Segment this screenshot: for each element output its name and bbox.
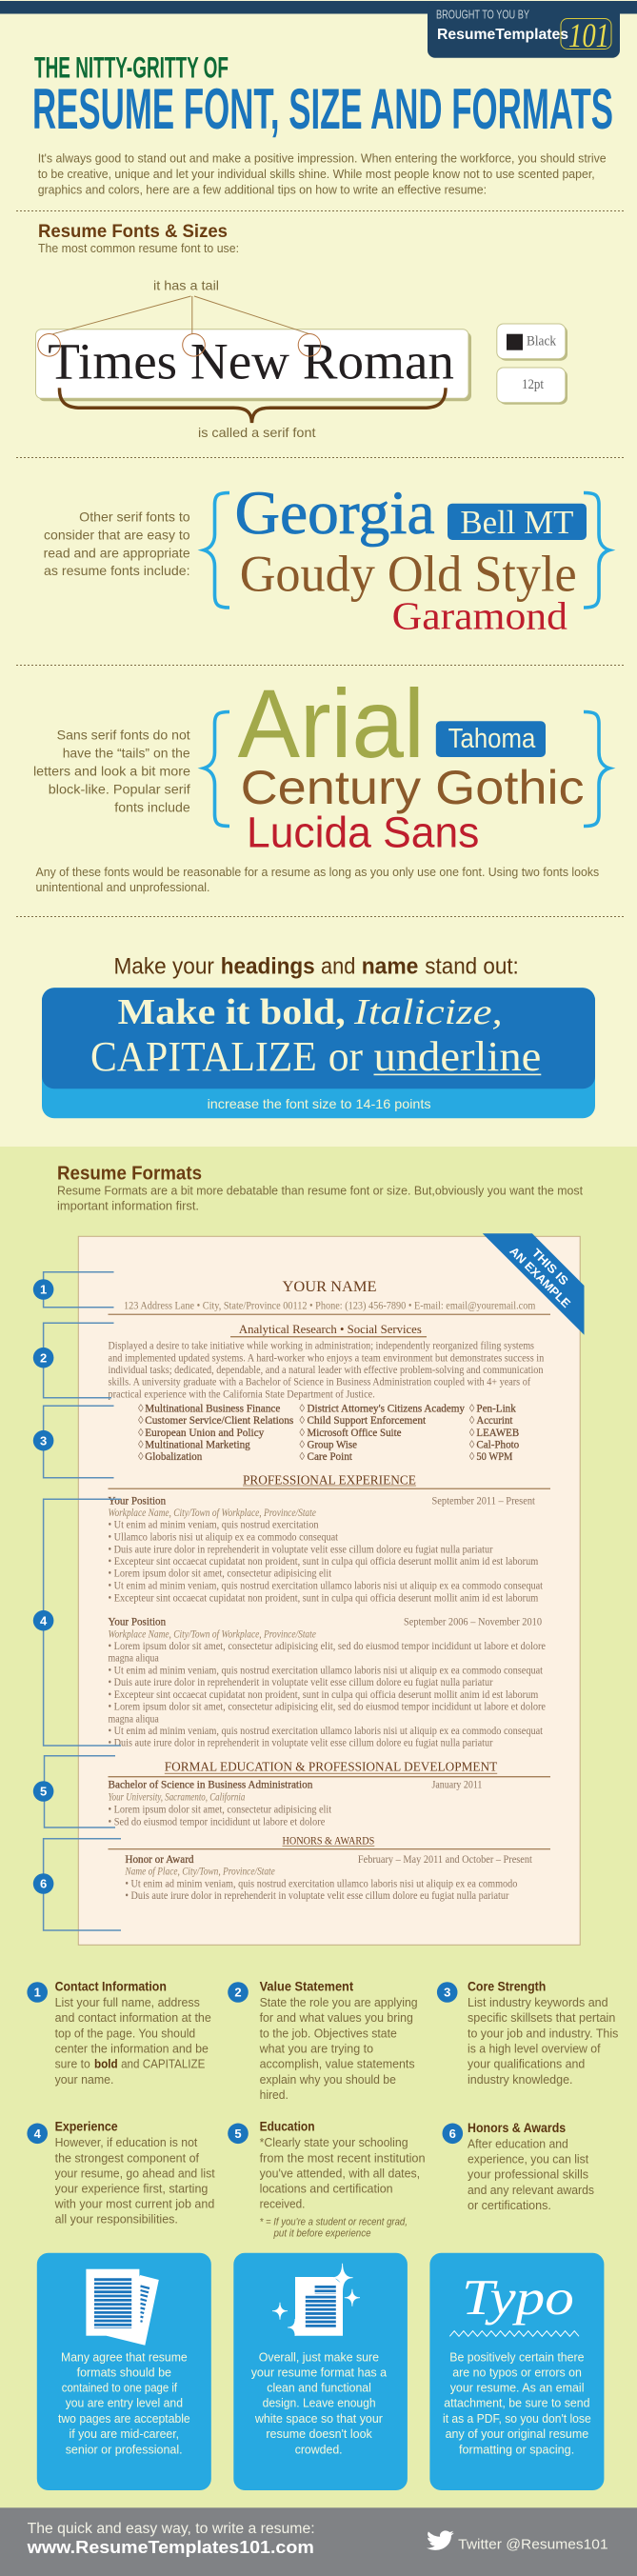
brand tab <box>428 1 620 58</box>
card: page length <box>37 2253 211 2490</box>
card text: Be positively certain there <box>449 2349 585 2364</box>
resume: core strengths list: ◊ <box>299 1403 305 1414</box>
tip 4: experience: 4 <box>34 2127 42 2141</box>
callout 1: contact bracket <box>33 1272 113 1308</box>
resume: honors and awards <box>109 1834 550 1902</box>
tip 5: education: locations and certification <box>260 2181 393 2195</box>
font sample: tahoma: Tahoma <box>448 724 536 754</box>
intro paragraph: It's always good to stand out and make a positive impression. When entering the workforce, you should strive <box>38 151 607 166</box>
callout 5: education bracket: 5 <box>40 1785 47 1799</box>
resume: core strengths list: ◊ <box>299 1428 305 1439</box>
footer band <box>0 2507 637 2576</box>
font sample: georgia: Georgia <box>235 478 435 547</box>
tip 2: value statement: for and what values you bring <box>260 2010 413 2025</box>
emphasis banner: increase the font size to 14-16 points <box>208 1096 431 1111</box>
resume: professional experience: • Duis aute irure dolor in reprehenderit in voluptate velit esse cillum dolore eu fugiat nulla pariatur <box>109 1738 493 1749</box>
footer call to action <box>27 2521 315 2557</box>
resume: core strengths list: Care Point <box>307 1451 353 1463</box>
tip 5: education <box>228 2120 426 2240</box>
callout 3: core strengths bracket: 3 <box>40 1433 47 1448</box>
tip 3: core strength: specific skillsets that pertain <box>468 2010 615 2025</box>
tip 6: honors and awards: Honors & Awards <box>468 2121 566 2135</box>
resume: core strengths list: Customer Service/Client Relations <box>145 1415 294 1427</box>
font sample: goudy old style: Goudy Old Style <box>240 546 577 603</box>
card text: Many agree that resume <box>61 2349 188 2364</box>
tip 1: contact information: center the information and be <box>55 2041 209 2055</box>
resume: core strengths list: Child Support Enforcement <box>307 1415 427 1427</box>
resume: core strengths list: ◊ <box>469 1440 475 1451</box>
brand tab: ResumeTemplates <box>437 27 568 43</box>
size chip: 12pt: 12pt <box>522 377 544 392</box>
resume: core strengths list: Pen-Link <box>476 1403 516 1414</box>
tip 2: value statement: to the job. Objectives state <box>260 2026 397 2040</box>
resume: core strengths list: Group Wise <box>307 1440 357 1451</box>
resume: core strengths list: ◊ <box>469 1415 475 1427</box>
tip 2: value statement: Value Statement <box>260 1980 354 1994</box>
card text: senior or professional. <box>66 2442 183 2456</box>
resume: professional experience: Workplace Name, City/Town of Workplace, Province/State <box>109 1508 316 1519</box>
tip 2: value statement: 2 <box>234 1986 242 2000</box>
resume: core strengths list: ◊ <box>138 1440 144 1451</box>
tip 1: contact information: top of the page. You should <box>55 2026 195 2040</box>
note on font usage <box>36 865 600 894</box>
footer twitter handle <box>427 2530 608 2553</box>
resume: professional experience: magna aliqua <box>109 1714 159 1726</box>
footer call to action: The quick and easy way, to write a resume: <box>28 2521 315 2537</box>
icon: typo word with squiggle <box>449 2270 579 2336</box>
label: is called a serif font: is called a serif font <box>198 425 316 440</box>
font sample: garamond: Garamond <box>392 594 567 638</box>
tip 4: experience <box>27 2120 215 2227</box>
text: other serif fonts: read and are appropriate <box>44 545 190 560</box>
colour chip: black: Black <box>527 334 557 349</box>
resume: value statement: Displayed a desire to take initiative while working in administration; independently reorganized filing systems <box>109 1341 534 1352</box>
brand tab: BROUGHT TO YOU BY <box>436 8 529 21</box>
card text: clean and functional <box>267 2381 371 2395</box>
resume: honors and awards: February – May 2011 and October – Present <box>358 1854 533 1866</box>
text: sans serif fonts: Sans serif fonts do not <box>57 728 190 743</box>
card text: are no typos or errors on <box>452 2365 582 2379</box>
callout 1: contact bracket: 1 <box>40 1283 47 1297</box>
resume: education <box>109 1759 550 1827</box>
card text: resume doesn't look <box>266 2426 372 2441</box>
resume: value statement: practical experience with the California State Department of Justice. <box>109 1388 375 1400</box>
emphasis banner: underline <box>373 1033 541 1080</box>
heading: make your headings and name stand out: and <box>321 954 355 980</box>
resume: value statement <box>109 1323 545 1400</box>
braces: sans serif fonts <box>204 712 609 827</box>
icon: sparkling page <box>272 2264 360 2336</box>
callout 4: experience bracket <box>33 1499 121 1746</box>
resume: value statement: individual tasks; dedicated, dependable, and a natural leader with effective problem-solving and communication <box>109 1365 544 1376</box>
tip 3: core strength: industry knowledge. <box>468 2072 573 2087</box>
resume: core strengths list: ◊ <box>138 1428 144 1439</box>
text: other serif fonts: consider that are easy to <box>44 528 190 543</box>
resume: honors and awards: • Duis aute irure dolor in reprehenderit in voluptate velit esse cillum dolore eu fugiat nulla pariatur <box>125 1890 509 1902</box>
heading: resume fonts and sizes: The most common resume font to use: <box>38 241 239 255</box>
title <box>32 50 613 141</box>
tip 6: honors and awards: experience, you can list <box>468 2152 588 2167</box>
text: sans serif fonts: have the “tails” on the <box>63 746 190 761</box>
resume: core strengths list: Multinational Business Finance <box>145 1403 280 1414</box>
card text: your resume format has a <box>251 2365 388 2379</box>
resume: core strengths list: Accurint <box>476 1415 513 1427</box>
font sample: bell mt: Bell MT <box>460 504 573 541</box>
card: clean design <box>233 2253 408 2490</box>
tip 1: contact information: 1 <box>34 1986 41 2000</box>
text: other serif fonts: Other serif fonts to <box>79 509 190 525</box>
callout 6: honors bracket: 6 <box>40 1877 47 1891</box>
ribbon: this is an example <box>483 1233 585 1335</box>
card text: your resume. As an email <box>450 2381 585 2395</box>
resume: value statement: and implemented updated systems. A hard-worker who enjoys a team environment but demonstrates success in <box>109 1352 545 1364</box>
tip 3: core strength: Core Strength <box>468 1980 546 1994</box>
tail pointer lines and circles <box>38 296 321 356</box>
tip 5: education: you've attended, with all dates, <box>260 2166 420 2180</box>
text: other serif fonts: as resume fonts include: <box>44 563 190 578</box>
heading: make your headings and name stand out: stand out: <box>425 954 519 980</box>
resume: contact block: YOUR NAME <box>282 1279 377 1295</box>
text: other serif fonts <box>44 509 190 578</box>
tip 5: education: * = If you're a student or recent grad, <box>260 2217 408 2228</box>
resume: professional experience: • Lorem ipsum dolor sit amet, consectetur adipisicing elit <box>109 1568 332 1580</box>
resume: core strengths list: ◊ <box>299 1451 305 1463</box>
tip 3: core strength: is a high level overview of <box>468 2041 601 2055</box>
tip 5: education: from the most recent institution <box>260 2150 426 2165</box>
tip 4: experience: Experience <box>55 2120 118 2134</box>
card text: attachment, be sure to send <box>444 2396 590 2410</box>
resume: core strengths list: ◊ <box>138 1403 144 1414</box>
resume: contact block: 123 Address Lane • City, State/Province 00112 • Phone: (123) 456-7890 • E-mail: email@youremail.com <box>124 1301 535 1312</box>
tip 2: value statement: State the role you are applying <box>260 1995 418 2009</box>
emphasis banner: Italicize, <box>353 992 503 1032</box>
footer twitter handle: Twitter @Resumes101 <box>458 2537 608 2553</box>
card: typos <box>429 2253 604 2490</box>
tip 6: honors and awards <box>442 2121 594 2212</box>
resume: core strengths list: ◊ <box>299 1440 305 1451</box>
emphasis banner: Make it bold, <box>118 992 346 1032</box>
card text: formats should be <box>77 2365 171 2379</box>
tip 2: value statement: accomplish, value statements <box>260 2057 415 2071</box>
resume: professional experience: Workplace Name, City/Town of Workplace, Province/State <box>109 1628 316 1640</box>
tip 4: experience: However, if education is not <box>55 2135 198 2149</box>
heading: resume formats: Resume Formats <box>57 1163 202 1184</box>
tip 3: core strength <box>437 1980 619 2087</box>
tip 5: education: put it before experience <box>273 2228 371 2240</box>
intro paragraph: graphics and colors, here are a few additional tips on how to write an effective resume: <box>38 182 487 196</box>
resume: core strengths list: District Attorney's Citizens Academy <box>307 1403 465 1414</box>
resume: professional experience: • Duis aute irure dolor in reprehenderit in voluptate velit esse cillum dolore eu fugiat nulla pariatur <box>109 1677 493 1688</box>
tip 4: experience: with your most current job and <box>54 2197 214 2211</box>
size chip: 12pt <box>497 368 567 405</box>
resume: professional experience: • Lorem ipsum dolor sit amet, consectetur adipisicing elit, sed do eiusmod tempor incididunt ut labore et dolore <box>109 1641 546 1652</box>
intro paragraph: to be creative, unique and let your individual skills shine. While most people know not to use scented paper, <box>38 167 595 181</box>
example resume sheet <box>78 1236 580 1945</box>
resume: core strengths list: Globalization <box>145 1451 203 1463</box>
card text: if you are mid-career, <box>69 2426 179 2441</box>
tip 6: honors and awards: After education and <box>468 2136 568 2150</box>
ribbon: this is an example: AN EXAMPLE <box>507 1245 573 1310</box>
resume: professional experience: • Ut enim ad minim veniam, quis nostrud exercitation ullamco laboris nisi ut aliquip ex ea commodo consequat <box>109 1580 544 1591</box>
resume: professional experience: • Excepteur sint occaecat cupidatat non proident, sunt in culpa qui officia deserunt mollit anim id est laborum <box>109 1556 538 1568</box>
tip 1: contact information: and contact information at the <box>55 2010 211 2025</box>
text: sans serif fonts <box>33 728 190 814</box>
resume: core strengths list <box>138 1403 520 1463</box>
resume: value statement: skills. A university graduate with a Bachelor of Science in Business Administration coupled with 4+ years of <box>109 1377 530 1388</box>
card text: white space so that your <box>254 2411 384 2426</box>
footer call to action: www.ResumeTemplates101.com <box>27 2537 314 2557</box>
resume: professional experience: • Excepteur sint occaecat cupidatat non proident, sunt in culpa qui officia deserunt mollit anim id est laborum <box>109 1689 538 1701</box>
resume: core strengths list: Cal-Photo <box>476 1440 519 1451</box>
font sample: century gothic: Century Gothic <box>241 761 585 814</box>
tip 4: experience: the strongest component of <box>55 2150 199 2165</box>
emphasis banner <box>42 988 595 1118</box>
callout 2: value statement bracket: 2 <box>40 1350 47 1365</box>
tip 1: contact information: Contact Information <box>55 1980 167 1994</box>
brand tab: 101 <box>568 16 609 54</box>
card text: two pages are acceptable <box>58 2411 190 2426</box>
resume: professional experience: September 2006 – November 2010 <box>404 1617 542 1628</box>
note on font usage: unintentional and unprofessional. <box>36 880 209 894</box>
card text <box>443 2349 591 2456</box>
card text: it as a PDF, so you don't lose <box>443 2411 591 2426</box>
resume: honors and awards: HONORS & AWARDS <box>282 1834 374 1847</box>
resume: professional experience: Your Position <box>109 1617 166 1628</box>
tip 2: value statement: hired. <box>260 2087 289 2102</box>
heading: resume formats <box>57 1163 583 1213</box>
resume: core strengths list: ◊ <box>138 1451 144 1463</box>
tip 4: experience: all your responsibilities. <box>55 2212 178 2227</box>
card text <box>251 2349 388 2456</box>
heading: make your headings and name stand out: name <box>362 954 418 980</box>
resume: professional experience: September 2011 – Present <box>432 1495 536 1507</box>
heading: make your headings and name stand out: headings <box>221 954 315 980</box>
tip 2: value statement <box>228 1980 418 2102</box>
card text: you are entry level and <box>66 2396 183 2410</box>
card text: crowded. <box>295 2442 343 2456</box>
heading: resume fonts and sizes <box>38 221 239 255</box>
resume: honors and awards: • Ut enim ad minim veniam, quis nostrud exercitation ullamco laboris nisi ut aliquip ex ea commodo <box>125 1879 518 1890</box>
resume: professional experience: • Duis aute irure dolor in reprehenderit in voluptate velit esse cillum dolore eu fugiat nulla pariatur <box>109 1544 493 1555</box>
icon: stacked pages <box>86 2269 159 2346</box>
emphasis banner: CAPITALIZE <box>90 1033 317 1080</box>
tip 1: contact information: sure to <box>55 2057 90 2071</box>
card text: Overall, just make sure <box>259 2349 379 2364</box>
resume: professional experience: • Ut enim ad minim veniam, quis nostrud exercitation ullamco laboris nisi ut aliquip ex ea commodo consequat <box>109 1726 544 1737</box>
resume: core strengths list: ◊ <box>299 1415 305 1427</box>
tip 6: honors and awards: 6 <box>449 2127 456 2141</box>
braces: serif fonts <box>204 493 609 608</box>
resume: core strengths list: European Union and Policy <box>145 1428 265 1439</box>
resume: honors and awards: Honor or Award <box>125 1854 194 1866</box>
tip 5: education: Education <box>260 2120 315 2134</box>
tip 2: value statement: what you are trying to <box>259 2041 373 2055</box>
resume: professional experience: Your Position <box>109 1495 166 1507</box>
resume: professional experience: • Ut enim ad minim veniam, quis nostrud exercitation ullamco laboris nisi ut aliquip ex ea commodo consequat <box>109 1665 544 1676</box>
card text: any of your original resume <box>446 2426 588 2441</box>
resume: professional experience: PROFESSIONAL EXPERIENCE <box>243 1472 416 1487</box>
resume: core strengths list: Microsoft Office Suite <box>307 1428 402 1439</box>
card text <box>58 2349 190 2456</box>
resume: education: FORMAL EDUCATION & PROFESSIONAL DEVELOPMENT <box>165 1759 498 1773</box>
tip 4: experience: your resume, go ahead and list <box>55 2166 215 2180</box>
times new roman sample box: Times New Roman <box>48 332 454 390</box>
card text: contained to one page if <box>62 2381 177 2395</box>
font sample: arial: Arial <box>238 669 425 778</box>
resume: honors and awards: Name of Place, City/Town, Province/State <box>125 1867 275 1878</box>
tip 6: honors and awards: and any relevant awards <box>468 2183 594 2197</box>
text: sans serif fonts: block-like. Popular serif <box>49 781 190 796</box>
resume: education: • Lorem ipsum dolor sit amet, consectetur adipisicing elit <box>109 1805 332 1816</box>
resume: education: January 2011 <box>432 1780 483 1791</box>
heading: make your headings and name stand out: Make your <box>114 954 214 980</box>
tip 3: core strength: to your job and industry. This <box>468 2026 619 2040</box>
note on font usage: Any of these fonts would be reasonable for a resume as long as you only use one font. Using two fonts looks <box>36 865 600 879</box>
tip 1: contact information: and CAPITALIZE <box>121 2057 206 2071</box>
tip 4: experience: your experience first, starting <box>55 2181 208 2195</box>
resume: core strengths list: Multinational Marketing <box>145 1440 250 1451</box>
callout 4: experience bracket: 4 <box>40 1613 48 1627</box>
tip 5: education: 5 <box>234 2127 242 2141</box>
colour chip: black <box>497 324 567 361</box>
tip 1: contact information: your name. <box>55 2072 114 2087</box>
tip 3: core strength: your qualifications and <box>468 2057 585 2071</box>
resume: core strengths list: ◊ <box>469 1428 475 1439</box>
tip 3: core strength: List industry keywords and <box>468 1995 608 2009</box>
icon: typo word with squiggle: Typo <box>462 2270 574 2326</box>
resume: education: Your University, Sacramento, California <box>109 1792 245 1804</box>
font sample: lucida sans: Lucida Sans <box>247 808 479 856</box>
resume: professional experience <box>109 1472 550 1749</box>
resume: core strengths list: LEAWEB <box>476 1428 520 1439</box>
card text: design. Leave enough <box>263 2396 376 2410</box>
callout 6: honors bracket <box>33 1839 121 1930</box>
tip 5: education: *Clearly state your schooling <box>260 2135 408 2149</box>
tip 1: contact information: bold <box>94 2057 118 2071</box>
heading: resume formats: Resume Formats are a bit more debatable than resume font or size. But,obviously you want the most <box>57 1183 583 1197</box>
tip 3: core strength: 3 <box>444 1986 450 2000</box>
tip 1: contact information: List your full name, address <box>55 1995 200 2009</box>
ribbon: this is an example: THIS IS <box>529 1246 571 1288</box>
tip 2: value statement: explain why you should be <box>260 2072 396 2087</box>
resume: core strengths list: ◊ <box>138 1415 144 1427</box>
intro paragraph <box>38 151 607 196</box>
heading: make your headings and name stand out <box>114 954 519 980</box>
tip 1: contact information <box>27 1980 211 2087</box>
resume: education: Bachelor of Science in Business Administration <box>109 1780 313 1791</box>
resume: professional experience: • Ut enim ad minim veniam, quis nostrud exercitation <box>109 1520 319 1531</box>
callout 3: core strengths bracket <box>33 1406 113 1478</box>
tip 6: honors and awards: your professional skills <box>468 2167 589 2182</box>
resume: contact block <box>109 1279 550 1315</box>
tip 5: education: received. <box>260 2197 305 2211</box>
resume: education: • Sed do eiusmod tempor incididunt ut labore et dolore <box>109 1816 325 1827</box>
resume: core strengths list: ◊ <box>469 1403 475 1414</box>
resume formats background <box>0 1147 637 2508</box>
text: sans serif fonts: fonts include <box>114 799 190 814</box>
resume: core strengths list: 50 WPM <box>476 1451 512 1463</box>
resume: professional experience: • Ullamco laboris nisi ut aliquip ex ea commodo consequat <box>109 1532 339 1544</box>
label: it has a tail: it has a tail <box>153 277 219 292</box>
brace under sample <box>59 388 446 423</box>
emphasis banner: or <box>328 1033 363 1080</box>
heading: resume formats: important information first. <box>57 1199 199 1213</box>
title: THE NITTY-GRITTY OF <box>34 50 229 85</box>
card text: formatting or spacing. <box>459 2442 574 2456</box>
callout 2: value statement bracket <box>33 1323 113 1398</box>
resume: core strengths list: ◊ <box>469 1451 475 1463</box>
resume: professional experience: magna aliqua <box>109 1653 159 1665</box>
text: sans serif fonts: letters and look a bit more <box>33 764 190 779</box>
resume: value statement: Analytical Research • Social Services <box>239 1323 422 1336</box>
resume: professional experience: • Excepteur sint occaecat cupidatat non proident, sunt in culpa qui officia deserunt mollit anim id est laborum <box>109 1592 538 1604</box>
callout 5: education bracket <box>33 1756 115 1827</box>
header bar <box>0 1 637 13</box>
heading: resume fonts and sizes: Resume Fonts & Sizes <box>38 221 228 242</box>
tip 6: honors and awards: or certifications. <box>468 2198 551 2212</box>
resume: professional experience: • Lorem ipsum dolor sit amet, consectetur adipisicing elit, sed do eiusmod tempor incididunt ut labore et dolore <box>109 1702 546 1713</box>
